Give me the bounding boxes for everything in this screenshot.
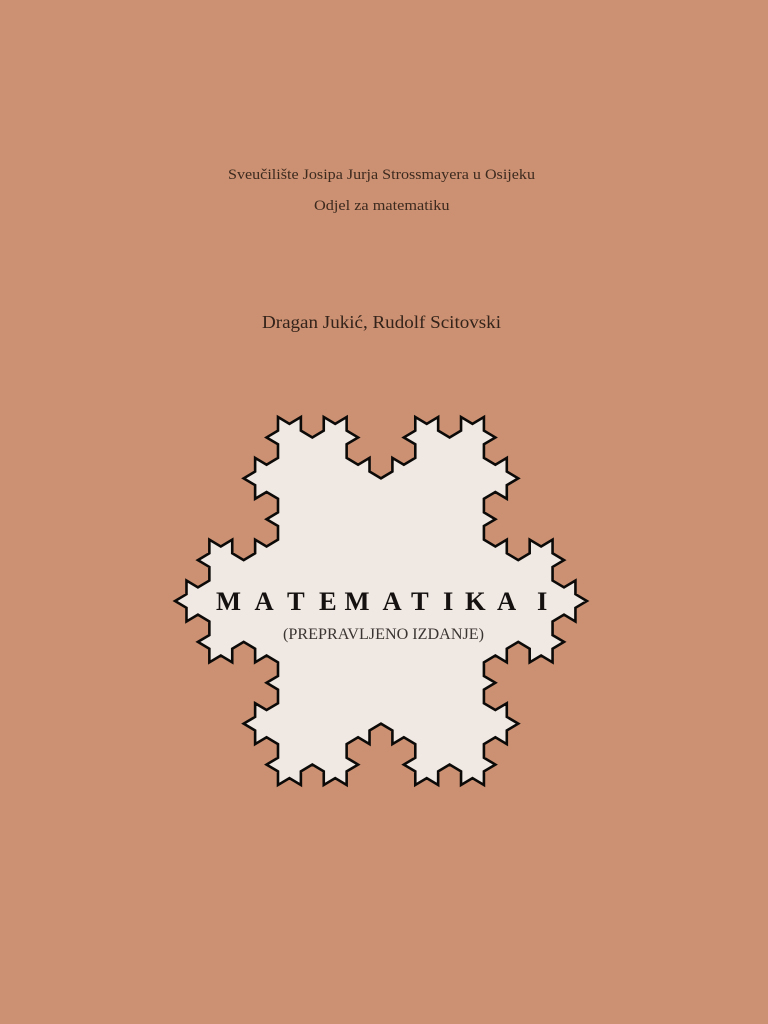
text: authors: Dragan Jukić, Rudolf Scitovski bbox=[262, 312, 501, 332]
heading: university name: Sveučilište Josipa Jurja Strossmayera u Osijeku bbox=[228, 167, 536, 183]
title: MATEMATIKA I: MATEMATIKAI bbox=[216, 586, 547, 616]
heading: department: Odjel za matematiku bbox=[314, 198, 450, 214]
subtitle: (PREPRAVLJENO IZDANJE) bbox=[283, 626, 484, 643]
icon: Koch snowflake bbox=[175, 417, 587, 785]
